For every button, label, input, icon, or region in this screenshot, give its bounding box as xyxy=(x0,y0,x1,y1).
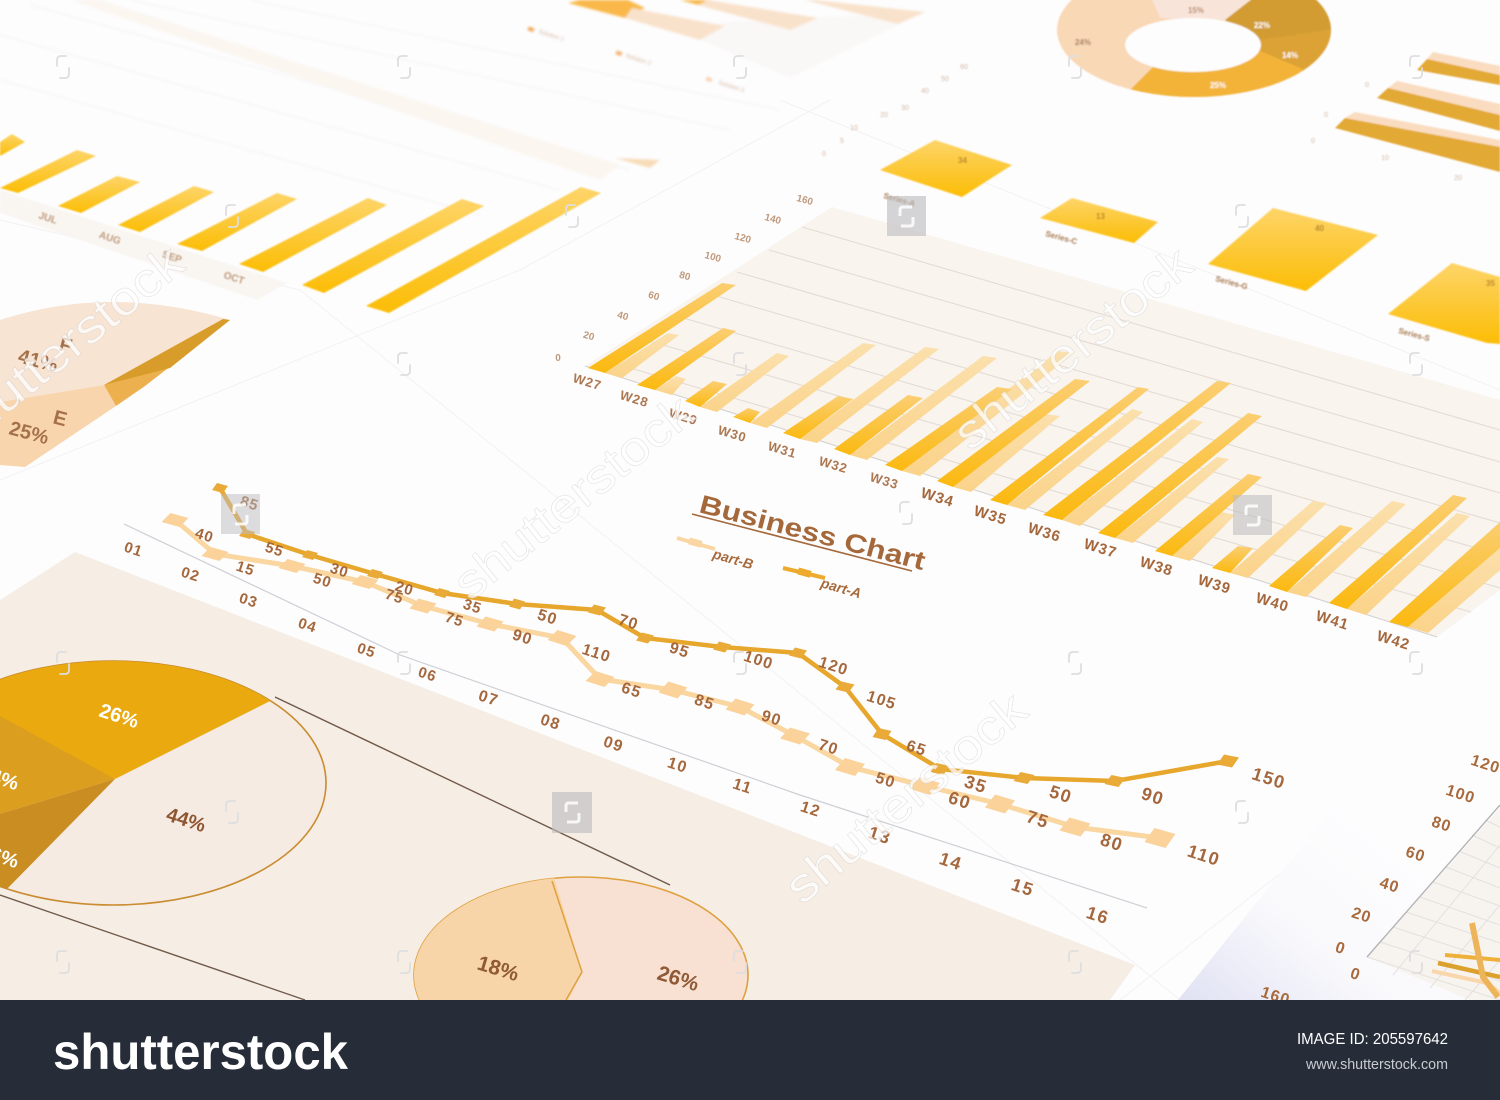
block chart axis: 0 xyxy=(822,151,826,158)
top right horizontal bars xyxy=(1311,52,1500,182)
part-B value labels: 15 xyxy=(234,558,257,580)
x axis week labels: W35 xyxy=(972,503,1009,529)
second pie labels: 18% xyxy=(475,952,522,986)
x axis labels: 13 xyxy=(866,822,894,848)
x axis labels: 09 xyxy=(601,734,626,756)
x axis week labels: W34 xyxy=(919,485,956,511)
x axis week labels: W33 xyxy=(868,469,900,492)
part-B value labels: 50 xyxy=(311,570,334,592)
block chart axis: 60 xyxy=(960,64,968,71)
top left bar chart xyxy=(0,134,601,313)
grid lines xyxy=(585,227,1500,637)
top left month labels: AUG xyxy=(97,230,122,247)
x axis labels: 12 xyxy=(798,799,823,821)
light series bars xyxy=(605,333,1500,633)
small line series xyxy=(1432,923,1500,997)
part-A value labels: 100 xyxy=(741,648,775,673)
y axis labels: 40 xyxy=(616,310,630,323)
part-A value labels: 70 xyxy=(616,612,641,634)
part-A value labels: 50 xyxy=(535,607,560,629)
chart title: Business Chart xyxy=(696,489,929,576)
pie slice F xyxy=(0,302,230,402)
part-A value labels: 90 xyxy=(1139,783,1167,809)
x axis week labels: W39 xyxy=(1196,572,1233,598)
y axis labels xyxy=(555,193,815,364)
x axis labels: 14 xyxy=(937,848,965,874)
far page: faint grid lines xyxy=(0,0,780,215)
y axis labels: 140 xyxy=(763,212,783,227)
top right axis labels: 20 xyxy=(1454,175,1462,182)
part-B value labels: 75 xyxy=(1024,806,1052,832)
y axis labels: 100 xyxy=(703,250,723,265)
part-A value labels: 35 xyxy=(962,771,990,797)
x axis week labels: W32 xyxy=(817,453,849,476)
part-B value labels: 65 xyxy=(619,680,644,702)
bottom right page xyxy=(1178,690,1500,1009)
pie labels: F xyxy=(57,334,74,358)
top right axis labels xyxy=(1311,82,1462,182)
watermark text xyxy=(0,235,1203,914)
block values and names: 35 xyxy=(1486,279,1495,288)
pie percent labels xyxy=(0,700,209,873)
donut labels: 22% xyxy=(1254,21,1270,30)
block values and names: Series-G xyxy=(1214,274,1249,291)
block series C xyxy=(1040,198,1158,243)
x axis week labels: W38 xyxy=(1138,554,1175,580)
pie labels xyxy=(7,334,74,449)
part-B value labels: 85 xyxy=(692,692,717,714)
x axis labels: 10 xyxy=(665,755,690,777)
small chart axis labels: 20 xyxy=(1349,905,1373,927)
small watermark marks xyxy=(57,56,1422,973)
page shadow xyxy=(1178,690,1500,1000)
watermark text: shutterstock xyxy=(775,682,1038,914)
part-B value labels: 70 xyxy=(816,737,841,759)
watermark logo squares xyxy=(221,196,1272,833)
top centre chart xyxy=(527,0,925,168)
y axis labels: 60 xyxy=(647,290,661,303)
legend part-A: part-A xyxy=(818,574,863,601)
donut labels: 14% xyxy=(1282,51,1298,60)
top left month labels: JUL xyxy=(37,210,58,227)
block chart axis: 10 xyxy=(850,125,858,132)
small chart axis labels xyxy=(1259,752,1500,1009)
part-B value labels: 110 xyxy=(580,641,613,666)
x axis labels: 02 xyxy=(179,564,202,586)
bottom left panel xyxy=(0,552,1135,1000)
y axis labels: 160 xyxy=(795,193,815,208)
block values and names: Series-S xyxy=(1397,326,1431,343)
pie percent labels: 44% xyxy=(163,804,209,837)
line chart xyxy=(122,483,1288,928)
donut labels xyxy=(1075,6,1298,90)
part-B value labels: 75 xyxy=(383,586,406,608)
x axis labels xyxy=(122,539,1112,928)
pie slice E xyxy=(0,385,116,467)
x axis labels: 06 xyxy=(416,664,439,686)
y axis labels: 80 xyxy=(678,270,692,283)
x axis week labels: W29 xyxy=(667,405,699,428)
x axis week labels: W41 xyxy=(1314,608,1351,634)
series part-A line xyxy=(212,483,1239,787)
mid dark slice xyxy=(0,716,115,814)
small chart axis labels: 60 xyxy=(1403,844,1427,866)
y axis labels: 20 xyxy=(582,330,596,343)
part-A value labels: 35 xyxy=(461,596,484,618)
top centre chart legend: Solution 3 xyxy=(717,80,745,94)
top right axis labels: 10 xyxy=(1381,155,1389,162)
part-B value labels: 50 xyxy=(873,770,898,792)
top centre chart panel xyxy=(700,12,925,78)
block series G xyxy=(1208,208,1378,291)
part-A value labels xyxy=(238,493,1288,809)
dark series bars xyxy=(588,283,1500,627)
x axis labels: 08 xyxy=(538,712,563,734)
part-A value labels: 65 xyxy=(904,738,929,760)
block chart axis xyxy=(822,64,968,158)
x axis week labels: W31 xyxy=(766,438,798,461)
block chart axis: 30 xyxy=(901,105,909,112)
part-A value labels: 55 xyxy=(263,539,286,561)
footer bar xyxy=(0,1000,1500,1100)
block values and names xyxy=(882,156,1495,343)
top centre chart legend xyxy=(527,26,745,94)
part-A value labels: 105 xyxy=(864,688,898,713)
part-A value labels: 50 xyxy=(1047,781,1075,807)
x axis week labels: W37 xyxy=(1082,536,1119,562)
18% slice xyxy=(414,878,582,1000)
block values and names: 40 xyxy=(1315,224,1324,233)
part-B value labels: 80 xyxy=(1098,829,1126,855)
small far bar xyxy=(615,158,660,168)
part-A value labels: 30 xyxy=(328,560,351,582)
series part-B line xyxy=(162,513,1176,848)
footer url: www.shutterstock.com xyxy=(1305,1057,1448,1073)
x axis line xyxy=(124,524,1147,908)
legend part-B: part-B xyxy=(710,545,755,572)
x axis week labels: W36 xyxy=(1026,520,1063,546)
legend part-B xyxy=(677,537,755,572)
y axis labels: 0 xyxy=(555,353,561,364)
block values and names: Series-C xyxy=(1044,229,1078,246)
top right axis labels: 0 xyxy=(1311,138,1315,145)
part-A value labels: 150 xyxy=(1249,763,1288,793)
part-B value labels: 110 xyxy=(1185,841,1223,870)
block chart axis: 40 xyxy=(921,88,929,95)
block series S xyxy=(1388,263,1500,344)
x axis week labels xyxy=(571,370,1412,654)
small chart axis labels: 100 xyxy=(1444,782,1477,807)
part-A value labels: 95 xyxy=(667,640,692,662)
top left month labels: OCT xyxy=(222,270,246,287)
darkest slice xyxy=(0,779,115,888)
pie percent labels: 26% xyxy=(96,700,142,733)
second pie labels xyxy=(475,952,702,996)
second pie chart xyxy=(413,876,749,1000)
x axis week labels: W30 xyxy=(716,422,748,445)
left pie chart xyxy=(0,302,230,467)
part-B value labels: 60 xyxy=(946,787,974,813)
donut labels: 15% xyxy=(1188,6,1204,15)
part-A value labels: 85 xyxy=(238,493,261,515)
block values and names: Series-A xyxy=(882,191,916,208)
top centre chart legend: Solution 2 xyxy=(624,53,652,67)
part-B value labels: 90 xyxy=(510,627,535,649)
top left strip of month labels xyxy=(0,190,287,300)
x axis labels: 15 xyxy=(1009,874,1037,900)
part-A value labels: 20 xyxy=(393,578,416,600)
far strip at top left xyxy=(70,0,620,180)
panel frame lines xyxy=(0,697,670,1000)
small chart axis labels: 0 xyxy=(1348,965,1363,984)
x axis labels: 05 xyxy=(355,640,378,662)
x axis labels: 07 xyxy=(476,688,501,710)
plot background xyxy=(585,207,1500,637)
26% slice xyxy=(0,661,270,779)
pie labels: 25% xyxy=(7,418,51,449)
slice divider xyxy=(552,881,582,1000)
x axis labels: 01 xyxy=(122,539,145,561)
small chart axis labels: 0 xyxy=(1333,939,1348,958)
small chart axis labels: 40 xyxy=(1377,875,1401,897)
watermark text: shutterstock xyxy=(444,385,705,611)
pie labels: 41% xyxy=(16,346,60,377)
small chart axis labels: 80 xyxy=(1429,814,1453,836)
part-A value labels: 120 xyxy=(816,654,850,679)
watermark logo glyphs xyxy=(234,207,1259,822)
top centre chart legend: Solution 1 xyxy=(537,29,565,43)
donut chart xyxy=(1056,0,1332,98)
top left month labels: SEP xyxy=(161,249,183,266)
chart legend xyxy=(677,537,863,601)
footer image id: IMAGE ID: 205597642 xyxy=(1297,1031,1448,1048)
y axis labels: 120 xyxy=(733,231,753,246)
x axis labels: 16 xyxy=(1084,902,1112,928)
pie dark wedges xyxy=(104,319,230,406)
x axis week labels: W27 xyxy=(571,370,603,393)
x axis week labels: W40 xyxy=(1254,590,1291,616)
part-B value labels: 75 xyxy=(443,609,466,631)
yellow block chart xyxy=(822,64,1500,344)
x axis labels: 04 xyxy=(296,615,319,637)
top left month labels xyxy=(37,210,246,287)
main bar chart xyxy=(555,193,1500,654)
block series A xyxy=(880,140,1012,197)
watermark text: shutterstock xyxy=(944,236,1203,461)
donut labels: 25% xyxy=(1210,81,1226,90)
top right axis labels: 0 xyxy=(1324,112,1328,119)
block values and names: 13 xyxy=(1096,212,1105,221)
small grid xyxy=(1367,805,1500,1000)
pie labels: E xyxy=(51,407,69,431)
legend part-A xyxy=(783,567,863,601)
part-B value labels xyxy=(193,525,1223,870)
second pie labels: 26% xyxy=(655,962,702,996)
block chart axis: 5 xyxy=(840,138,844,145)
x axis week labels: W28 xyxy=(618,387,650,410)
x axis labels: 11 xyxy=(731,776,754,798)
x axis labels: 03 xyxy=(237,590,260,612)
large pie chart xyxy=(0,640,326,910)
part-B value labels: 40 xyxy=(193,525,216,547)
part-B value labels: 90 xyxy=(759,708,784,730)
top centre bars xyxy=(568,0,925,40)
top right axis labels: 0 xyxy=(1365,82,1369,89)
footer logo: shutterstock xyxy=(53,1024,348,1080)
44% base slice xyxy=(0,661,326,905)
donut labels: 24% xyxy=(1075,38,1091,47)
x axis week labels: W42 xyxy=(1375,628,1412,654)
block chart axis: 20 xyxy=(880,112,888,119)
block chart axis: 50 xyxy=(941,76,949,83)
donut hole xyxy=(1125,18,1261,72)
small chart axis labels: 160 xyxy=(1259,984,1292,1009)
block values and names: 34 xyxy=(958,156,967,165)
